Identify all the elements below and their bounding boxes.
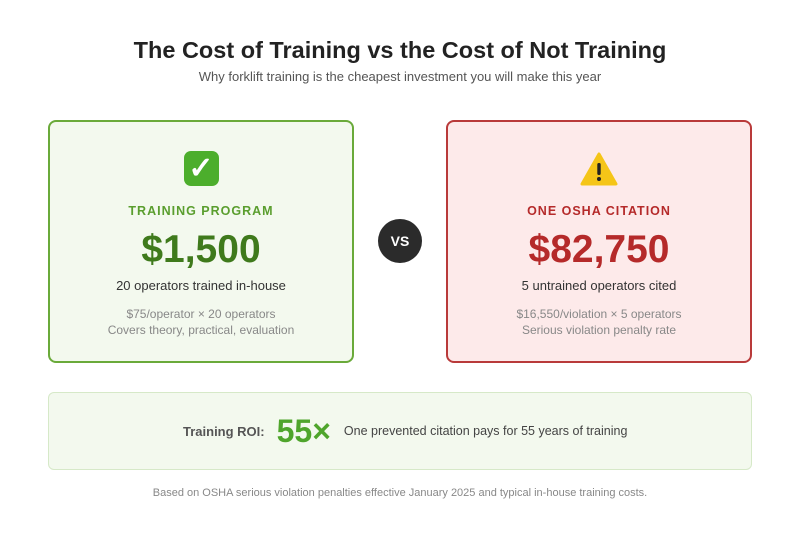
panel: osha citation	[446, 120, 752, 363]
amount: $82,750	[528, 228, 669, 271]
details: Serious violation penalty rate	[522, 323, 676, 337]
roi box	[48, 392, 752, 470]
details: Covers theory, practical, evaluation	[108, 323, 294, 337]
title: The Cost of Training vs the Cost of Not Training	[134, 37, 666, 63]
roi text: Training ROI:	[183, 424, 265, 438]
label: ONE OSHA CITATION	[527, 204, 671, 218]
label: TRAINING PROGRAM	[128, 204, 274, 218]
details: $16,550/violation × 5 operators	[516, 307, 682, 321]
icon: warning	[580, 152, 618, 186]
icon: green check: ✓	[188, 152, 214, 185]
subline: 5 untrained operators cited	[522, 278, 676, 293]
roi text: One prevented citation pays for 55 years of training	[344, 424, 627, 438]
icon: vs circle	[378, 219, 422, 263]
icon: vs circle: VS	[391, 233, 409, 249]
roi text	[183, 412, 627, 448]
footer note: Based on OSHA serious violation penalties effective January 2025 and typical in-house training costs.	[153, 487, 647, 499]
details: $75/operator × 20 operators	[126, 307, 276, 321]
subline: 20 operators trained in-house	[116, 278, 286, 293]
details	[108, 307, 294, 337]
roi text: 55×	[277, 412, 331, 448]
amount: $1,500	[141, 228, 261, 271]
details	[516, 307, 682, 337]
subtitle: Why forklift training is the cheapest investment you will make this year	[199, 69, 601, 84]
panel: training program	[48, 120, 354, 363]
